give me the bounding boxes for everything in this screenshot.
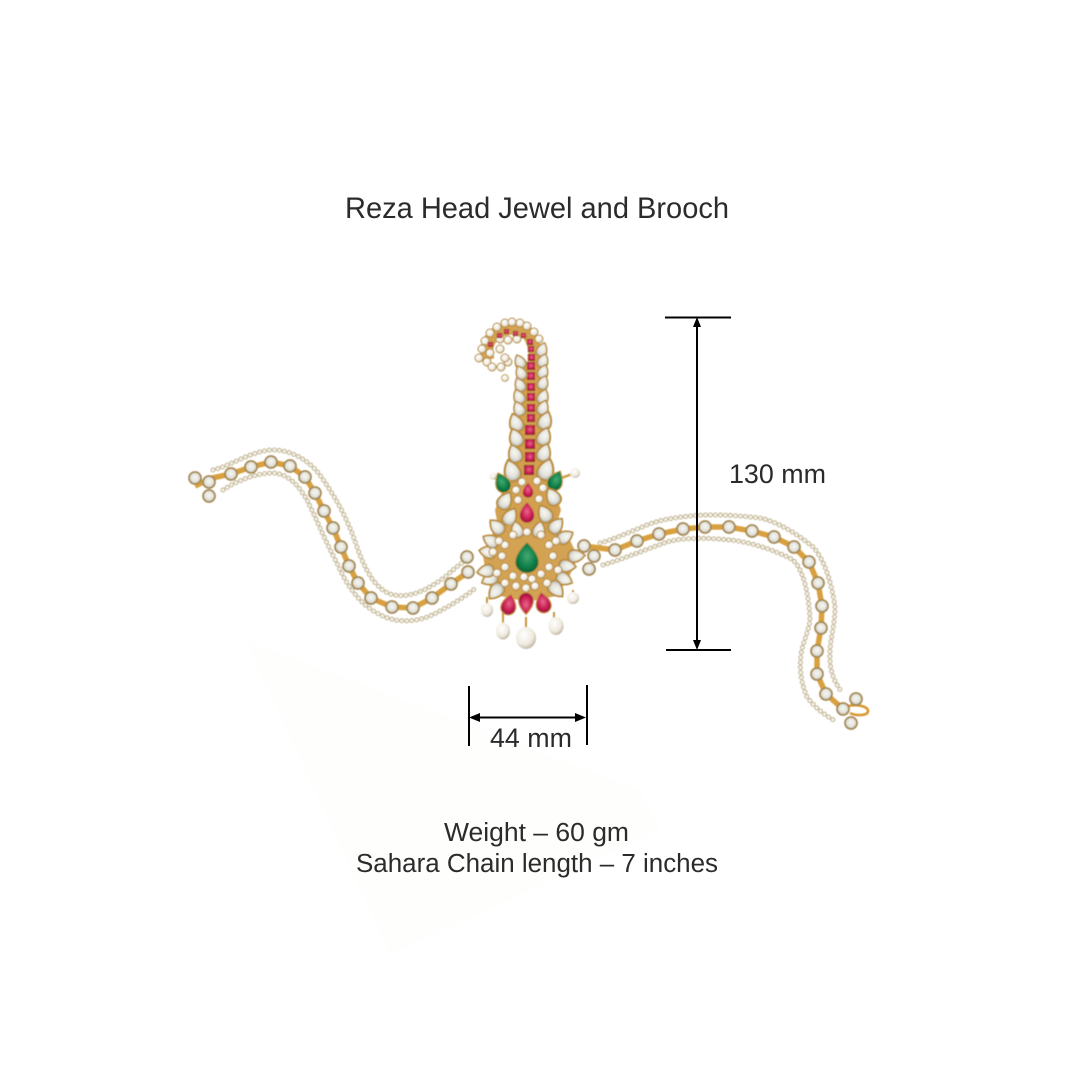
side pearls and emeralds — [493, 473, 575, 484]
width dimension: 44 mm: 44 mm — [490, 723, 572, 753]
height dimension: 130 mm — [665, 317, 826, 650]
upper rubies — [523, 483, 533, 498]
left chain — [189, 450, 477, 621]
ruby column — [488, 329, 535, 475]
plume gold backing — [487, 328, 536, 368]
title: Reza Head Jewel and Brooch — [345, 192, 729, 225]
center emerald — [515, 542, 539, 573]
curl pearl drop — [502, 375, 508, 381]
central plume — [475, 318, 580, 528]
clasp ring — [848, 705, 868, 715]
plume right leaves — [535, 341, 550, 358]
plume left leaves — [512, 353, 528, 370]
inner small stones — [523, 528, 531, 536]
specifications text — [356, 819, 718, 878]
height dimension: 130 mm: 130 mm — [729, 459, 826, 489]
curl stones — [475, 354, 483, 362]
specifications text: Weight – 60 gm — [444, 819, 629, 847]
width dimension: 44 mm — [469, 685, 587, 753]
right chain — [578, 515, 868, 729]
lower rubies — [499, 593, 518, 616]
jewel: head jewel and brooch — [189, 318, 868, 729]
brooch starburst — [476, 515, 586, 649]
pearl drops — [487, 590, 573, 628]
specifications text: Sahara Chain length – 7 inches — [356, 850, 718, 878]
outer leaves — [486, 516, 507, 537]
